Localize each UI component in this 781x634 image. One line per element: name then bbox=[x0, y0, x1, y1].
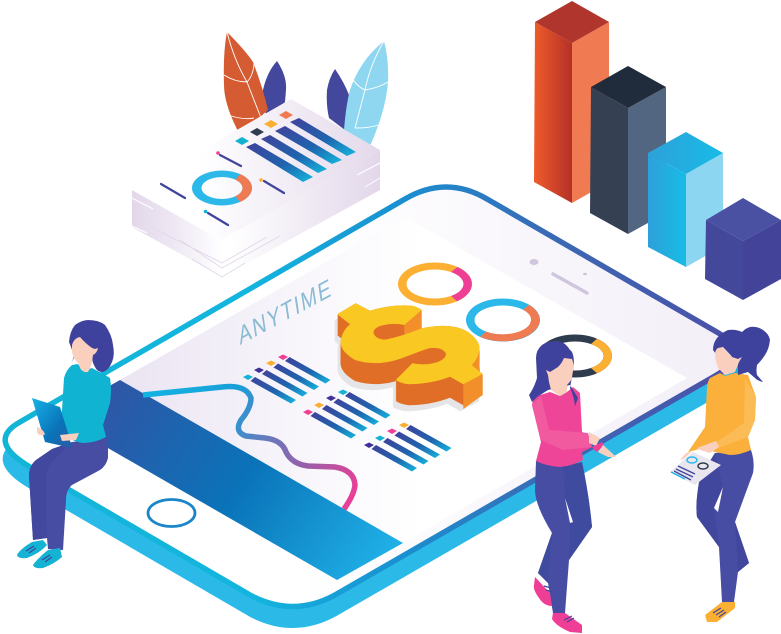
pants bbox=[29, 438, 108, 550]
plant leaves bbox=[224, 32, 388, 146]
person: woman in pink bbox=[529, 341, 616, 633]
3D dollar sign bbox=[334, 303, 483, 411]
pants bbox=[696, 450, 754, 602]
sleeve highlight bbox=[717, 378, 756, 448]
clipboard bbox=[32, 398, 72, 448]
shoes bbox=[534, 577, 582, 633]
legend bars group 3 bbox=[364, 422, 452, 472]
dollar shadow bbox=[334, 309, 480, 411]
home button bbox=[148, 500, 195, 526]
stack donut chart bbox=[192, 170, 252, 206]
leg gap bbox=[714, 487, 723, 512]
leaf: indigo right bbox=[327, 69, 349, 130]
donut ring: amber and pink bbox=[398, 262, 472, 306]
document stack bbox=[132, 99, 380, 277]
pants bbox=[535, 461, 592, 613]
screen bbox=[120, 217, 687, 543]
screen blue band bbox=[54, 380, 403, 580]
hands bbox=[680, 441, 719, 460]
face bbox=[715, 347, 742, 375]
hair bbox=[69, 320, 114, 372]
sweater bbox=[532, 387, 592, 467]
camera dot and speaker bbox=[530, 259, 587, 293]
bar: indigo bbox=[705, 198, 781, 300]
face bbox=[546, 358, 574, 396]
stack bars bbox=[235, 111, 356, 182]
hands bbox=[37, 427, 79, 441]
collar accent bbox=[733, 362, 740, 376]
hands and cuff bbox=[589, 432, 616, 457]
back leg shade bbox=[696, 453, 749, 572]
dollar light side faces bbox=[404, 310, 483, 409]
leaf: orange bbox=[224, 32, 268, 135]
stack small legend lines bbox=[161, 151, 284, 225]
leaf: indigo left bbox=[263, 61, 286, 118]
bar: sky blue bbox=[648, 132, 723, 267]
bar: orange bbox=[534, 1, 609, 203]
dollar extrusion bbox=[337, 303, 483, 405]
bar: dark navy bbox=[590, 66, 666, 234]
tablet side edge bbox=[5, 206, 735, 626]
shoes bbox=[17, 540, 62, 568]
tablet bbox=[5, 187, 735, 626]
ponytail hair bbox=[713, 327, 770, 382]
face bbox=[72, 337, 98, 372]
tablet face bbox=[5, 187, 735, 606]
legend bars group 1 bbox=[243, 354, 330, 404]
report sheet bbox=[670, 452, 721, 485]
person: seated woman with clipboard bbox=[17, 320, 114, 568]
shoe bbox=[705, 602, 735, 622]
back leg shade bbox=[538, 462, 592, 583]
back leg shade bbox=[29, 442, 72, 540]
text: ANYTIME: ANYTIME bbox=[237, 272, 334, 350]
hair bbox=[529, 341, 578, 406]
legend bars group 2 bbox=[303, 390, 390, 438]
wavy line chart bbox=[143, 386, 355, 509]
donut ring: cyan and orange bbox=[466, 298, 540, 342]
stack top sheet bbox=[132, 99, 380, 240]
person: woman in yellow holding report bbox=[670, 327, 770, 622]
sweater bbox=[61, 364, 111, 443]
donut ring: dark and amber bbox=[538, 334, 612, 378]
3D bar chart bbox=[534, 1, 781, 300]
leg gap bbox=[565, 498, 573, 523]
stack sides bbox=[132, 150, 380, 277]
leaf: light blue bbox=[344, 41, 388, 146]
sleeve highlight bbox=[532, 396, 592, 450]
dollar top face bbox=[337, 303, 483, 384]
sweater bbox=[688, 373, 756, 455]
